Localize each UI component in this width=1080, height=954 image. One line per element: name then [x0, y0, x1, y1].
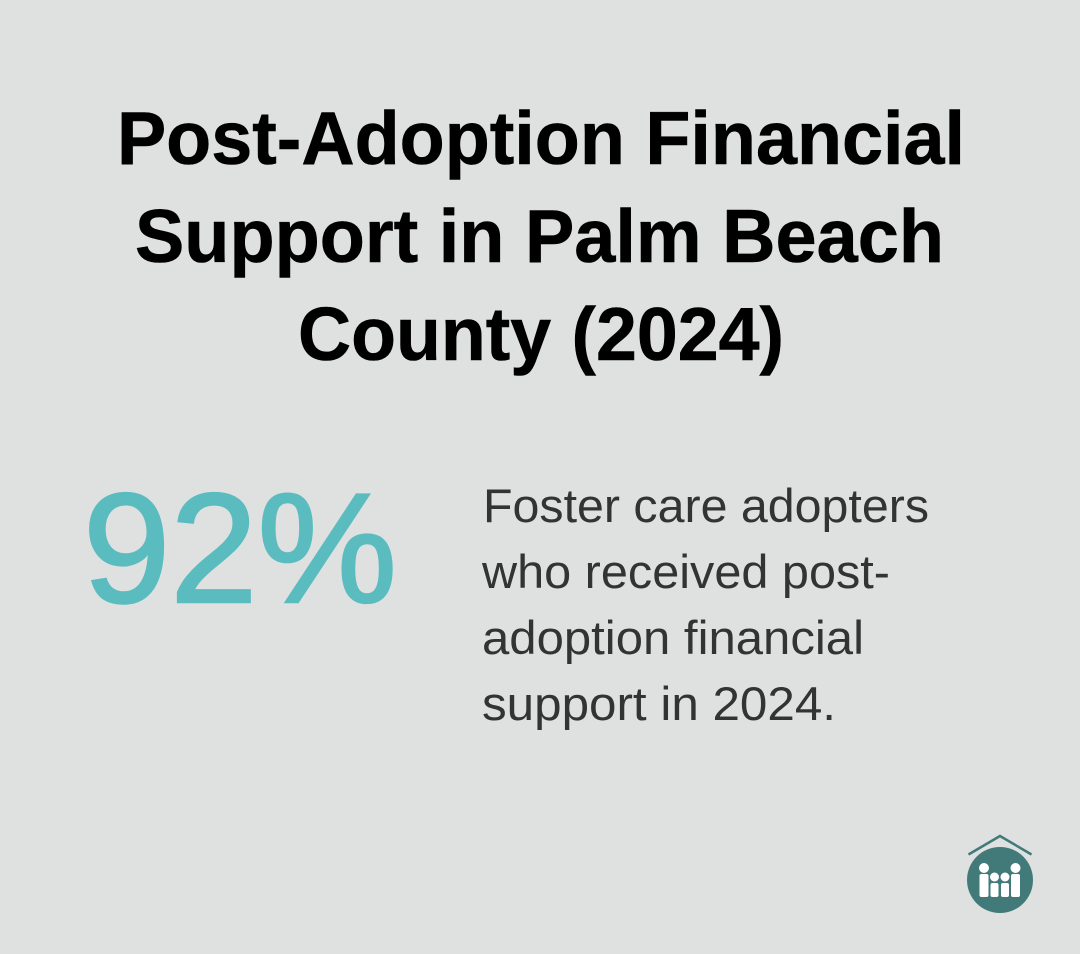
description text: support in 2024.: [482, 677, 836, 730]
description text: adoption financial: [482, 611, 864, 664]
title: Support in Palm Beach: [135, 194, 944, 278]
title: Post-Adoption Financial: [117, 96, 965, 180]
title: [117, 96, 965, 376]
icon: family in house logo: [967, 836, 1033, 913]
description text: [481, 479, 929, 730]
description text: who received post-: [481, 545, 890, 598]
description text: Foster care adopters: [483, 479, 929, 532]
statistic: 92%: 92%: [83, 462, 397, 636]
title: County (2024): [298, 292, 784, 376]
